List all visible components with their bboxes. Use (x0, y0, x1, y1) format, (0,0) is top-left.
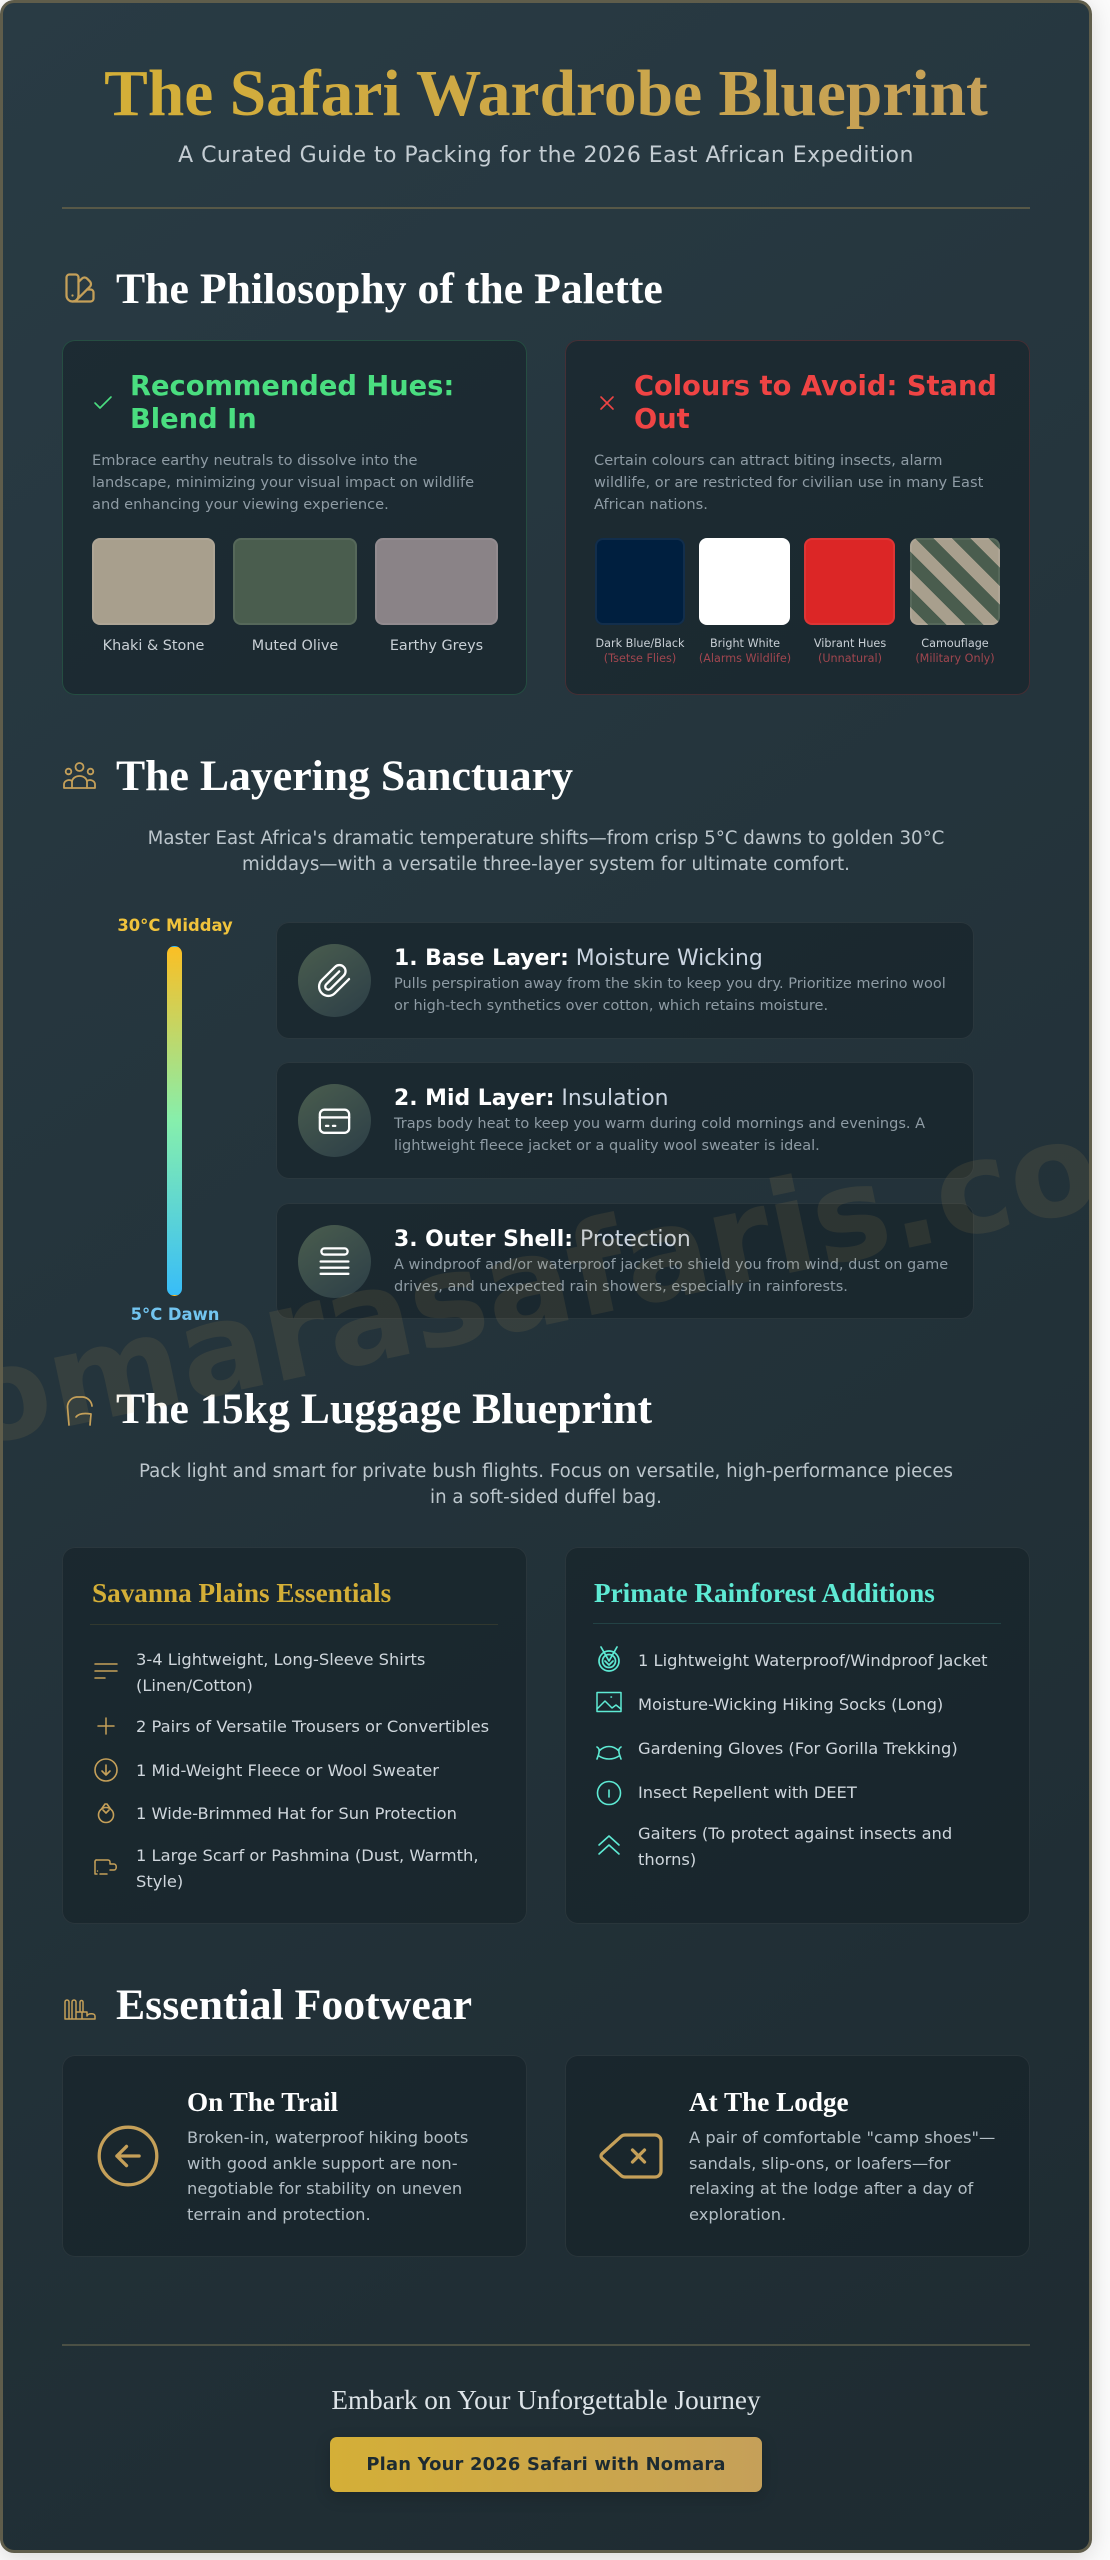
footwear description: sandals, slip-ons, or loafers—for (689, 2154, 950, 2173)
layer card: mid (276, 1062, 974, 1179)
icon: image (596, 1692, 622, 1712)
layer description (394, 1257, 948, 1295)
temperature bar (167, 946, 182, 1296)
icon: card (298, 1084, 371, 1157)
title: The Safari Wardrobe Blueprint (104, 58, 988, 130)
swatch: dark blue (595, 538, 685, 625)
swatch label: (Tsetse Flies) (604, 652, 676, 664)
panel: colours to avoid (565, 340, 1030, 695)
heading (130, 371, 454, 435)
icon: arrow in circle (92, 2120, 164, 2192)
layer description (394, 976, 946, 1014)
footwear description: terrain and protection. (187, 2205, 371, 2224)
item: Gardening Gloves (For Gorilla Trekking) (638, 1739, 958, 1758)
icon: fish shape (596, 1746, 622, 1760)
icon: paperclip (298, 944, 371, 1017)
header (104, 58, 988, 168)
layer card: base (276, 922, 974, 1039)
icon: circle down (94, 1758, 118, 1782)
icon: delete tag (595, 2120, 667, 2192)
panel: at the lodge (565, 2055, 1030, 2257)
swatch label: Bright White (710, 637, 780, 650)
heading: Recommended Hues: (130, 371, 454, 402)
swatch label: Vibrant Hues (814, 637, 886, 650)
swatch label: Camouflage (921, 637, 989, 650)
swatch: olive (233, 538, 357, 625)
panel: recommended hues (62, 340, 527, 695)
icon: people (63, 762, 96, 789)
icon: plus (97, 1717, 115, 1735)
layer description: or high-tech synthetics over cotton, which retains moisture. (394, 998, 828, 1014)
footwear description (187, 2125, 468, 2227)
luggage intro: Pack light and smart for private bush flights. Focus on versatile, high-performance pieces (139, 1461, 953, 1482)
description: wildlife, or are restricted for civilian use in many East (594, 474, 983, 491)
icon: stacked lines (298, 1225, 371, 1298)
swatch: white (699, 538, 790, 625)
icon: check (94, 396, 112, 409)
luggage intro (139, 1461, 953, 1508)
layer description: lightweight fleece jacket or a quality wool sweater is ideal. (394, 1138, 820, 1154)
description: African nations. (594, 496, 708, 513)
icon: chevrons up (598, 1835, 620, 1855)
swatch label: Earthy Greys (390, 638, 483, 654)
swatch label (915, 637, 995, 664)
swatch label: Khaki & Stone (103, 638, 204, 654)
layer description: Pulls perspiration away from the skin to keep you dry. Prioritize merino wool (394, 976, 946, 992)
description: Certain colours can attract biting insects, alarm (594, 452, 942, 469)
item (136, 1650, 425, 1695)
section heading: luggage: The 15kg Luggage Blueprint (116, 1385, 652, 1433)
footwear title: At The Lodge (689, 2087, 849, 2117)
item: thorns) (638, 1850, 696, 1869)
section heading: palette: The Philosophy of the Palette (116, 265, 663, 313)
footwear description: with good ankle support are non- (187, 2154, 458, 2173)
description (92, 452, 474, 513)
swatch label (699, 637, 791, 664)
call to action button (330, 2437, 762, 2492)
swatch label: (Alarms Wildlife) (699, 652, 791, 664)
footwear description: Broken-in, waterproof hiking boots (187, 2128, 468, 2147)
label: 5C: 5°C Dawn (131, 1305, 219, 1324)
section heading: footwear: Essential Footwear (116, 1981, 472, 2029)
icon: boots (64, 1999, 96, 2021)
layer title: 2. Mid Layer: Insulation (394, 1086, 668, 1111)
layer title: 1. Base Layer: Moisture Wicking (394, 946, 763, 971)
layer title: 3. Outer Shell: Protection (394, 1227, 691, 1252)
swatch label (814, 637, 886, 664)
swatch label: (Military Only) (915, 652, 995, 664)
item: 1 Lightweight Waterproof/Windproof Jacket (638, 1651, 988, 1670)
item: 1 Large Scarf or Pashmina (Dust, Warmth, (136, 1846, 479, 1865)
item: Insect Repellent with DEET (638, 1783, 857, 1802)
swatch label (596, 637, 684, 664)
item: 1 Mid-Weight Fleece or Wool Sweater (136, 1761, 439, 1780)
icon: target (598, 1646, 620, 1672)
thermometer (117, 916, 233, 1324)
heading (634, 371, 997, 435)
icon: info (596, 1780, 622, 1806)
panel: savanna essentials (62, 1547, 527, 1924)
item: Style) (136, 1872, 183, 1891)
icon: rounded shape (94, 1859, 117, 1875)
panel: on the trail (62, 2055, 527, 2257)
item (638, 1824, 952, 1869)
swatch label: Muted Olive (252, 638, 338, 654)
icon: swatch book (65, 273, 95, 303)
item: 3-4 Lightweight, Long-Sleeve Shirts (136, 1650, 425, 1669)
panel: rainforest additions (565, 1547, 1030, 1924)
icon: bag (66, 1396, 93, 1426)
footwear title: On The Trail (187, 2087, 338, 2117)
icon: lines (94, 1663, 118, 1679)
layering intro (148, 828, 944, 875)
heading: Colours to Avoid: Stand (634, 371, 997, 402)
footwear description (689, 2125, 995, 2227)
layer description: Traps body heat to keep you warm during cold mornings and evenings. A (394, 1116, 925, 1132)
call to action button: Plan Your 2026 Safari with Nomara (366, 2454, 726, 2475)
icon: cross (600, 396, 614, 410)
layering intro: middays—with a versatile three-layer system for ultimate comfort. (242, 854, 850, 875)
description (594, 452, 983, 513)
icon: hat (98, 1803, 114, 1824)
item: 1 Wide-Brimmed Hat for Sun Protection (136, 1804, 457, 1823)
swatch: red (804, 538, 895, 625)
layer description: A windproof and/or waterproof jacket to shield you from wind, dust on game (394, 1257, 948, 1273)
layer description: drives, and unexpected rain showers, especially in rainforests. (394, 1279, 848, 1295)
heading: Blend In (130, 404, 257, 435)
label: 30C: 30°C Midday (117, 916, 233, 935)
footwear description: negotiable for stability on uneven (187, 2179, 462, 2198)
list heading: Primate Rainforest Additions (594, 1578, 935, 1608)
layering intro: Master East Africa's dramatic temperature shifts—from crisp 5°C dawns to golden 30°C (148, 828, 944, 849)
footer (330, 2380, 762, 2492)
item: (Linen/Cotton) (136, 1676, 253, 1695)
section heading: layering: The Layering Sanctuary (116, 752, 573, 800)
footwear description: relaxing at the lodge after a day of (689, 2179, 973, 2198)
subtitle: A Curated Guide to Packing for the 2026 East African Expedition (178, 143, 914, 168)
description: and enhancing your viewing experience. (92, 496, 389, 513)
item: Gaiters (To protect against insects and (638, 1824, 952, 1843)
description: Embrace earthy neutrals to dissolve into the (92, 452, 418, 469)
list heading: Savanna Plains Essentials (92, 1578, 391, 1608)
luggage intro: in a soft-sided duffel bag. (430, 1487, 662, 1508)
item: 2 Pairs of Versatile Trousers or Convertibles (136, 1717, 489, 1736)
layer description (394, 1116, 925, 1154)
swatch: grey (375, 538, 498, 625)
description: landscape, minimizing your visual impact on wildlife (92, 474, 474, 491)
heading: Out (634, 404, 690, 435)
footwear description: exploration. (689, 2205, 786, 2224)
swatch label: Dark Blue/Black (596, 637, 684, 650)
layer card: outer (276, 1203, 974, 1319)
swatch: khaki (92, 538, 215, 625)
item: Moisture-Wicking Hiking Socks (Long) (638, 1695, 943, 1714)
item (136, 1846, 479, 1891)
footwear description: A pair of comfortable "camp shoes"— (689, 2128, 995, 2147)
swatch: camouflage (910, 538, 1000, 625)
swatch label: (Unnatural) (818, 652, 882, 664)
footer text: Embark on Your Unforgettable Journey (331, 2385, 761, 2415)
